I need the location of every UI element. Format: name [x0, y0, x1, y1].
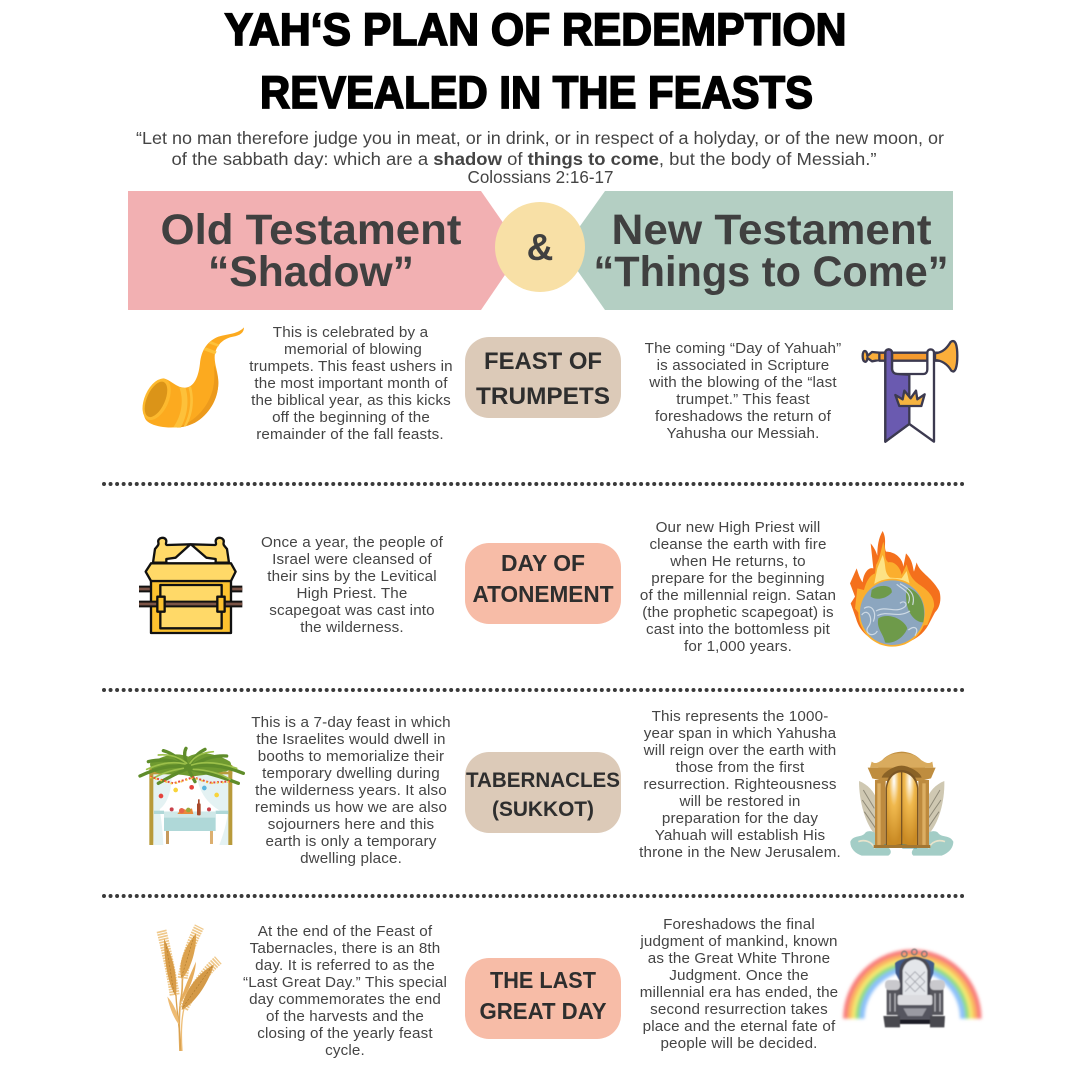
pill: day of atonement: ATONEMENT — [472, 581, 614, 607]
text: trumpets new testament: with the blowing of the “last — [648, 374, 837, 391]
text: last great day old testament: day. It is referred to as the — [255, 957, 435, 974]
text: trumpets new testament — [645, 340, 841, 442]
text: atonement old testament: the wilderness. — [300, 619, 404, 636]
text: last great day new testament: Judgment. Once the — [669, 967, 809, 984]
banner: new testament — [563, 191, 953, 310]
text: tabernacles new testament: year span in which Yahusha — [644, 725, 837, 742]
text: tabernacles old testament: the Israelites would dwell in — [256, 731, 446, 748]
text: trumpets old testament: off the beginning of the — [272, 409, 430, 426]
text: atonement new testament: of the millennial reign. Satan — [640, 587, 836, 604]
text: tabernacles new testament: will reign over the earth with — [643, 742, 836, 759]
text: tabernacles old testament: temporary dwelling during — [262, 765, 440, 782]
text: tabernacles new testament: Yahuah will establish His — [655, 827, 826, 844]
text: last great day new testament: Foreshadows the final — [663, 916, 815, 933]
pill: day of atonement — [465, 543, 621, 624]
text: last great day new testament: judgment of mankind, known — [639, 933, 838, 950]
text: last great day old testament: Tabernacles, there is an 8th — [250, 940, 440, 957]
pill: tabernacles: (SUKKOT) — [492, 798, 594, 821]
title — [224, 4, 846, 118]
text: last great day old testament: “Last Great Day.” This special — [243, 974, 447, 991]
text: tabernacles old testament — [251, 714, 451, 867]
pill: day of atonement: DAY OF — [501, 550, 585, 576]
text: trumpets old testament: This is celebrated by a — [273, 324, 429, 341]
text: last great day old testament: cycle. — [325, 1042, 365, 1059]
text: tabernacles old testament: reminds us how we are also — [255, 799, 447, 816]
text: tabernacles new testament — [639, 708, 841, 861]
banner: new testament: “Things to Come” — [594, 248, 948, 296]
text: last great day new testament — [639, 916, 838, 1052]
text: atonement old testament: High Priest. The — [296, 585, 408, 602]
text: tabernacles old testament: dwelling place. — [300, 850, 402, 867]
text: tabernacles old testament: This is a 7-day feast in which — [251, 714, 451, 731]
text: last great day new testament: place and the eternal fate of — [643, 1018, 836, 1035]
text: tabernacles new testament: preparation for the day — [662, 810, 818, 827]
ampersand badge: & — [527, 227, 553, 268]
text: atonement new testament: when He returns, to — [669, 553, 806, 570]
pill: the last great day — [465, 958, 621, 1039]
scripture quote: of the sabbath day: which are a shadow of things to come , but the body of Messiah.” — [172, 149, 877, 169]
text: tabernacles old testament: sojourners here and this — [268, 816, 435, 833]
text: last great day new testament: as the Great White Throne — [648, 950, 830, 967]
text: last great day old testament: of the harvests and the — [266, 1008, 424, 1025]
text: trumpets new testament: trumpet.” This feast — [676, 391, 810, 408]
text: trumpets old testament: remainder of the fall feasts. — [256, 426, 444, 443]
text: atonement new testament: cleanse the earth with fire — [649, 536, 827, 553]
icon: trumpet with banner — [863, 341, 957, 442]
text: atonement old testament: Israel were cleansed of — [272, 551, 432, 568]
ampersand badge — [495, 202, 585, 292]
text: tabernacles old testament: the wilderness years. It also — [255, 782, 447, 799]
icon: golden doors — [850, 752, 953, 856]
text: last great day new testament: millennial era has ended, the — [640, 984, 838, 1001]
text: atonement new testament: for 1,000 years. — [684, 638, 792, 655]
text: last great day old testament: day commemorates the end — [249, 991, 441, 1008]
icon: sukkah booth — [140, 748, 243, 845]
pill: the last great day: GREAT DAY — [480, 998, 606, 1024]
text: atonement new testament: cast into the bottomless pit — [646, 621, 831, 638]
icon: earth on fire — [850, 531, 940, 647]
text: trumpets old testament: the biblical year, as this kicks — [251, 392, 451, 409]
text: tabernacles new testament: This represents the 1000- — [652, 708, 828, 725]
text: atonement old testament: Once a year, the people of — [261, 534, 444, 551]
pill: the last great day: THE LAST — [490, 967, 596, 993]
pill: feast of trumpets: FEAST OF — [484, 348, 602, 375]
divider row 1 — [104, 482, 962, 486]
pill: feast of trumpets — [465, 337, 621, 418]
icon: rainbow and throne — [846, 949, 979, 1027]
text: trumpets new testament: The coming “Day of Yahuah” — [645, 340, 841, 357]
text: atonement new testament: prepare for the beginning — [651, 570, 825, 587]
icon: wheat stalks — [161, 927, 218, 1051]
text: last great day old testament: At the end of the Feast of — [258, 923, 433, 940]
text: trumpets new testament: Yahusha our Messiah. — [666, 425, 820, 442]
text: atonement old testament — [261, 534, 444, 636]
text: trumpets new testament: foreshadows the return of — [655, 408, 832, 425]
text: tabernacles new testament: will be restored in — [678, 793, 801, 810]
scripture quote: Colossians 2:16-17 — [468, 167, 614, 187]
text: atonement old testament: scapegoat was cast into — [269, 602, 435, 619]
text: last great day new testament: second resurrection takes — [650, 1001, 828, 1018]
text: tabernacles new testament: throne in the New Jerusalem. — [639, 844, 841, 861]
scripture quote: “Let no man therefore judge you in meat, or in drink, or in respect of a holyday, or of the new moon, or — [136, 128, 944, 148]
text: trumpets old testament: the most important month of — [254, 375, 448, 392]
text: tabernacles new testament: resurrection. Righteousness — [643, 776, 837, 793]
text: tabernacles old testament: booths to memorialize their — [258, 748, 444, 765]
pill: tabernacles — [465, 752, 621, 833]
text: atonement new testament: (the prophetic scapegoat) is — [642, 604, 834, 621]
pill: feast of trumpets: TRUMPETS — [476, 383, 610, 410]
banner: old testament: “Shadow” — [208, 248, 414, 296]
title: YAH‘S PLAN OF REDEMPTION — [224, 4, 846, 55]
text: last great day new testament: people will be decided. — [660, 1035, 818, 1052]
icon: shofar horn — [137, 327, 244, 428]
banner: old testament: Old Testament — [160, 206, 462, 254]
icon: ark of the covenant — [139, 538, 242, 633]
text: atonement new testament: Our new High Priest will — [656, 519, 820, 536]
banner: old testament — [128, 191, 522, 310]
text: atonement old testament: their sins by the Levitical — [267, 568, 437, 585]
text: trumpets old testament — [249, 324, 453, 443]
text: last great day old testament — [243, 923, 447, 1059]
scripture quote — [136, 128, 944, 187]
text: atonement new testament — [640, 519, 836, 655]
title: REVEALED IN THE FEASTS — [260, 67, 813, 118]
divider row 3 — [104, 894, 962, 898]
pill: tabernacles: TABERNACLES — [466, 769, 620, 792]
text: trumpets old testament: memorial of blowing — [284, 341, 422, 358]
text: tabernacles old testament: earth is only a temporary — [266, 833, 437, 850]
text: last great day old testament: closing of the yearly feast — [257, 1025, 433, 1042]
divider row 2 — [104, 688, 962, 692]
banner: new testament: New Testament — [612, 206, 932, 254]
text: trumpets old testament: trumpets. This feast ushers in — [249, 358, 453, 375]
text: tabernacles new testament: those from the first — [676, 759, 805, 776]
text: trumpets new testament: is associated in Scripture — [657, 357, 829, 374]
